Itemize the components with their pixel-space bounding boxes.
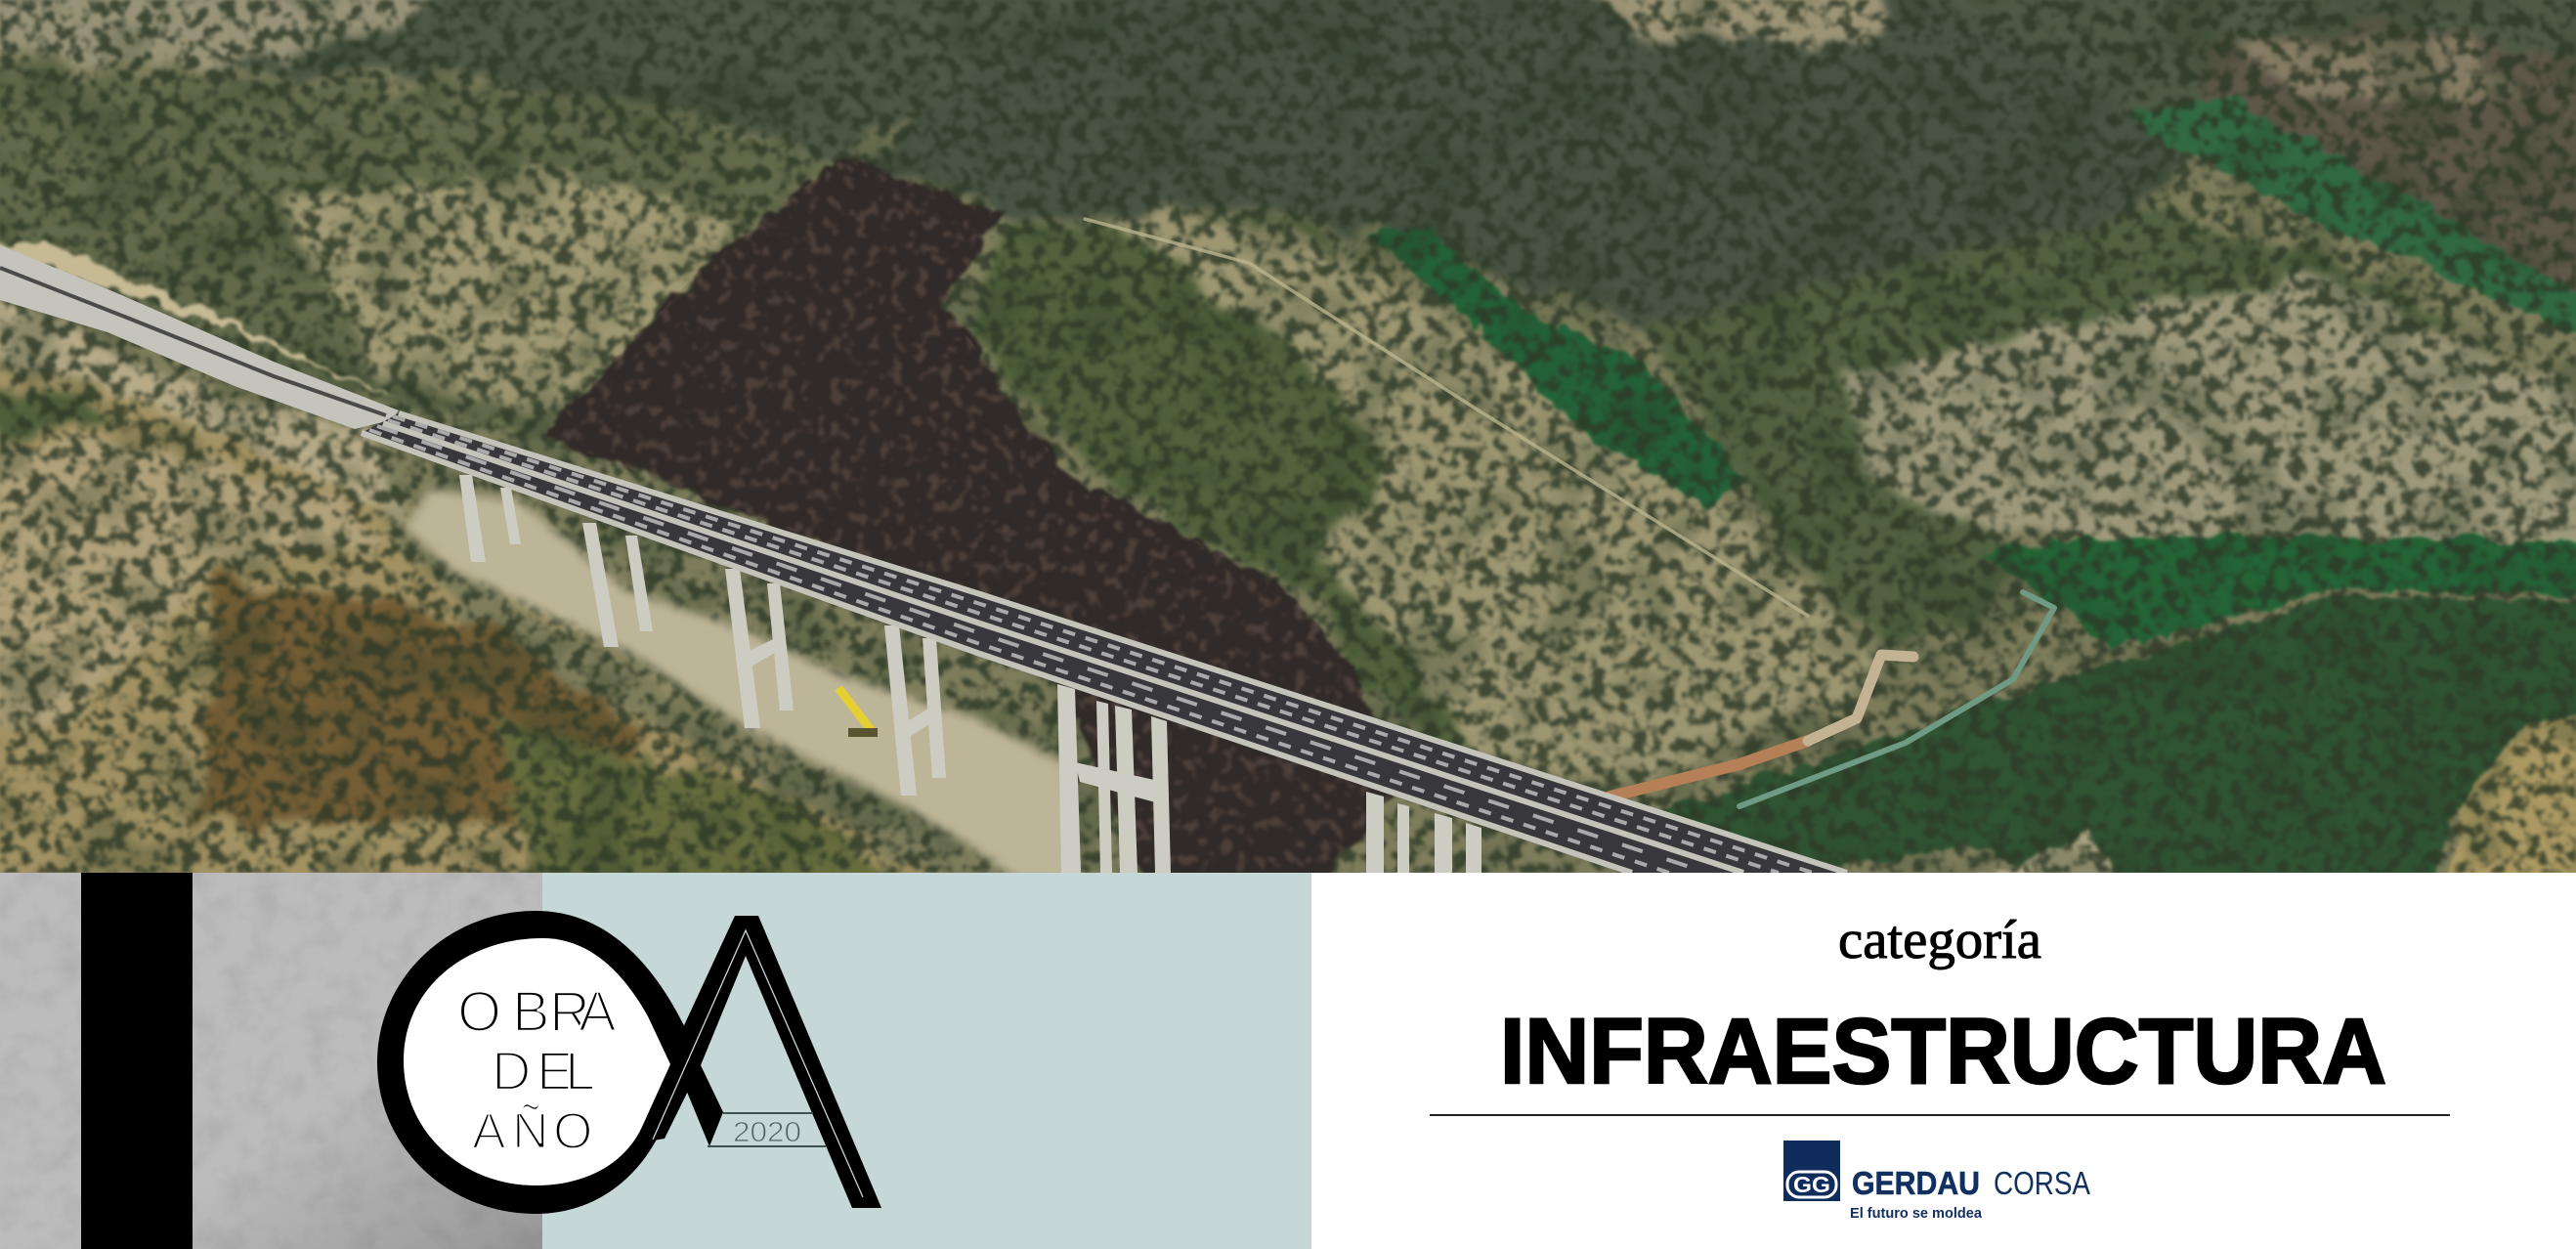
logo: OBRA: OBRA — [457, 980, 617, 1044]
logo: crossing stroke — [670, 1036, 723, 1146]
panel: white background — [1311, 873, 2576, 1249]
logo: white interior — [404, 938, 670, 1185]
logo: blue square with GG — [1783, 1141, 1840, 1201]
panel: mint background — [542, 873, 1311, 1249]
bridge deck — [362, 413, 1847, 873]
terrain: burnt hillside — [543, 157, 1394, 873]
terrain: large vegetation patches — [0, 0, 2576, 873]
logo: letter O ring — [377, 911, 689, 1214]
bridge piers — [459, 475, 1481, 873]
text: El futuro se moldea: El futuro se moldea — [1850, 1205, 1983, 1222]
terrain: shrub mottling — [0, 0, 2576, 873]
logo: year box: 2020 — [733, 1117, 801, 1148]
logo: AÑO: AÑO — [472, 1103, 592, 1160]
black vertical bar — [81, 873, 193, 1249]
text: CORSA: CORSA — [1994, 1165, 2090, 1201]
photo: aerial view of the viaduct in the hills — [0, 0, 2576, 904]
dirt road and stream in the valley — [1085, 219, 2054, 806]
panel: concrete background — [0, 873, 543, 1249]
terrain base — [0, 0, 2576, 873]
heading: INFRAESTRUCTURA: INFRAESTRUCTURA — [1500, 1000, 2386, 1103]
logo: DEL: DEL — [492, 1040, 595, 1101]
logo: blue square with GG: GG — [1793, 1172, 1830, 1197]
logo: letter A — [653, 916, 881, 1208]
terrain: roadside strip — [0, 243, 410, 403]
text: GERDAU: GERDAU — [1852, 1165, 1980, 1201]
construction pad under the bridge — [406, 489, 1075, 880]
logo: Gerdau Corsa — [1783, 1141, 2090, 1222]
terrain: forests and cliffs — [1363, 99, 2576, 887]
logo: Obra del Año 2020 — [377, 911, 881, 1214]
text: categoría: categoría — [1838, 910, 2041, 970]
terrain: atmospheric shade — [0, 0, 2576, 873]
divider line — [1430, 1114, 2450, 1116]
approach road — [0, 245, 399, 429]
yellow crane — [838, 688, 878, 737]
terrain: hillside colour regions — [0, 0, 2576, 904]
logo: year box — [708, 1113, 826, 1148]
logo: thin highlight line on A — [653, 930, 863, 1197]
